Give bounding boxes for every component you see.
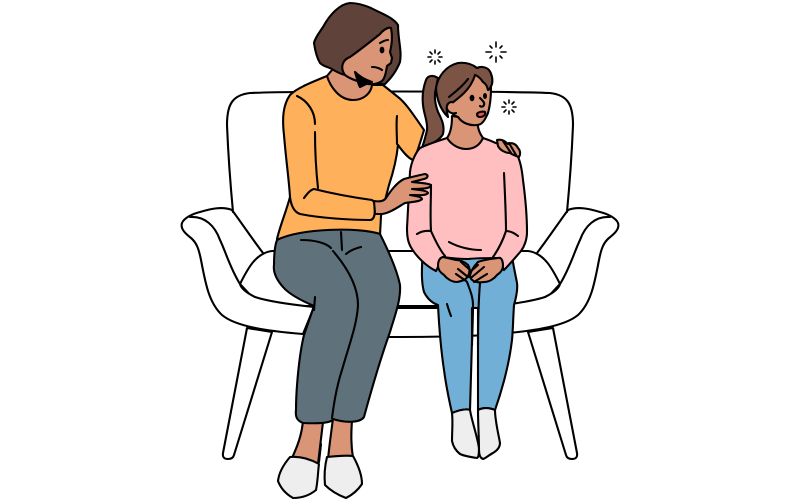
- mother mouth: [372, 67, 382, 70]
- mother face: [342, 28, 392, 84]
- mother jaw shadow: [355, 72, 372, 87]
- mother eye and brow: [380, 40, 388, 53]
- mother pants: [274, 230, 400, 423]
- girl ear: [447, 102, 456, 113]
- girl hair: [436, 63, 492, 117]
- mother shirt details: [297, 96, 397, 188]
- mother's hand on girl's shoulder: [497, 140, 520, 157]
- girl face: [448, 70, 491, 125]
- mother torso: [277, 76, 424, 239]
- burst: lower right: [502, 100, 516, 114]
- mother sleeve: [290, 189, 375, 220]
- mother pants details: [301, 232, 361, 418]
- girl neck: [447, 116, 483, 149]
- seat front lines: [310, 308, 490, 337]
- sofa legs: [223, 328, 577, 459]
- seat cushion: [240, 251, 560, 306]
- left armrest: [182, 208, 314, 334]
- girl: [374, 63, 527, 459]
- mother hair: [314, 3, 401, 84]
- girl mouth: [477, 112, 485, 117]
- girl socks: [452, 408, 500, 459]
- girl ponytail: [422, 76, 444, 148]
- girl sweater details: [417, 173, 518, 257]
- burst: top right: [486, 42, 506, 62]
- mother feet: [292, 418, 353, 464]
- girl jeans details: [447, 282, 480, 345]
- mother shoes: [278, 444, 362, 498]
- mother neck: [327, 55, 385, 100]
- right armrest: [486, 208, 618, 334]
- girl hands: [438, 257, 503, 282]
- girl jeans: [422, 250, 517, 413]
- mother: [274, 3, 424, 498]
- burst: left: [428, 50, 442, 64]
- girl sweater: [407, 138, 527, 271]
- mother's forearm and hand on girl's arm: [374, 174, 431, 214]
- sofa back: [227, 92, 573, 212]
- sofa: [182, 92, 618, 459]
- girl eyes and nose: [449, 79, 487, 107]
